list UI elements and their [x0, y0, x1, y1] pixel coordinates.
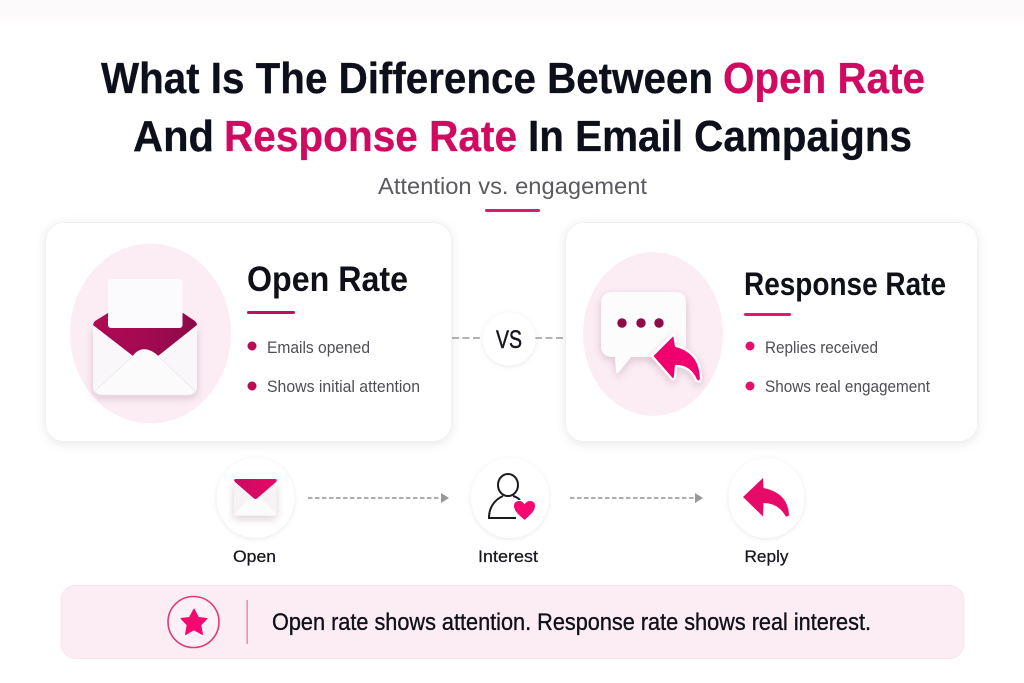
heading underline: [247, 311, 295, 314]
vs connector: [452, 337, 565, 339]
arrow: interest to reply: [570, 493, 703, 503]
bullet: replies received: Replies received: [765, 338, 878, 357]
callout: key takeaway: [61, 586, 964, 658]
bullet: shows initial attention: Shows initial attention: [267, 377, 420, 396]
title: What Is The Difference Between: [101, 54, 713, 103]
title: And: [133, 112, 214, 161]
bullet: emails opened: Emails opened: [267, 338, 370, 357]
title: Open Rate: [723, 54, 925, 103]
panel: response rate: [566, 222, 978, 442]
subtitle: Attention vs. engagement: [378, 173, 648, 199]
title: Response Rate: [224, 112, 517, 161]
title: [101, 54, 925, 161]
icon: reply arrow: [743, 478, 789, 517]
flow step: interest: Interest: [478, 547, 538, 566]
icon: closed envelope: [234, 479, 277, 516]
flow step: reply: [728, 458, 804, 566]
icon: open envelope: [70, 244, 231, 424]
flow step: open: [216, 458, 294, 566]
heading: response rate: Response Rate: [744, 266, 946, 302]
icon: chat bubble with reply arrow: [583, 252, 723, 416]
flow step: reply: Reply: [744, 547, 789, 566]
panel: open rate: [46, 222, 452, 442]
flow step: interest: [471, 458, 549, 566]
title: In Email Campaigns: [528, 112, 912, 161]
callout text: Open rate shows attention. Response rate shows real interest.: [272, 609, 871, 636]
vs badge: VS: [496, 326, 522, 354]
icon: person with heart: [489, 474, 536, 520]
heading: open rate: Open Rate: [247, 260, 408, 299]
arrow: open to interest: [308, 493, 449, 503]
vs badge: [482, 312, 536, 366]
heading underline: [744, 313, 791, 316]
icon: star badge: [168, 596, 219, 648]
subtitle underline: [485, 209, 540, 212]
flow step: open: Open: [233, 547, 276, 566]
bullet: shows real engagement: Shows real engagement: [765, 377, 930, 396]
callout divider: [246, 600, 248, 644]
